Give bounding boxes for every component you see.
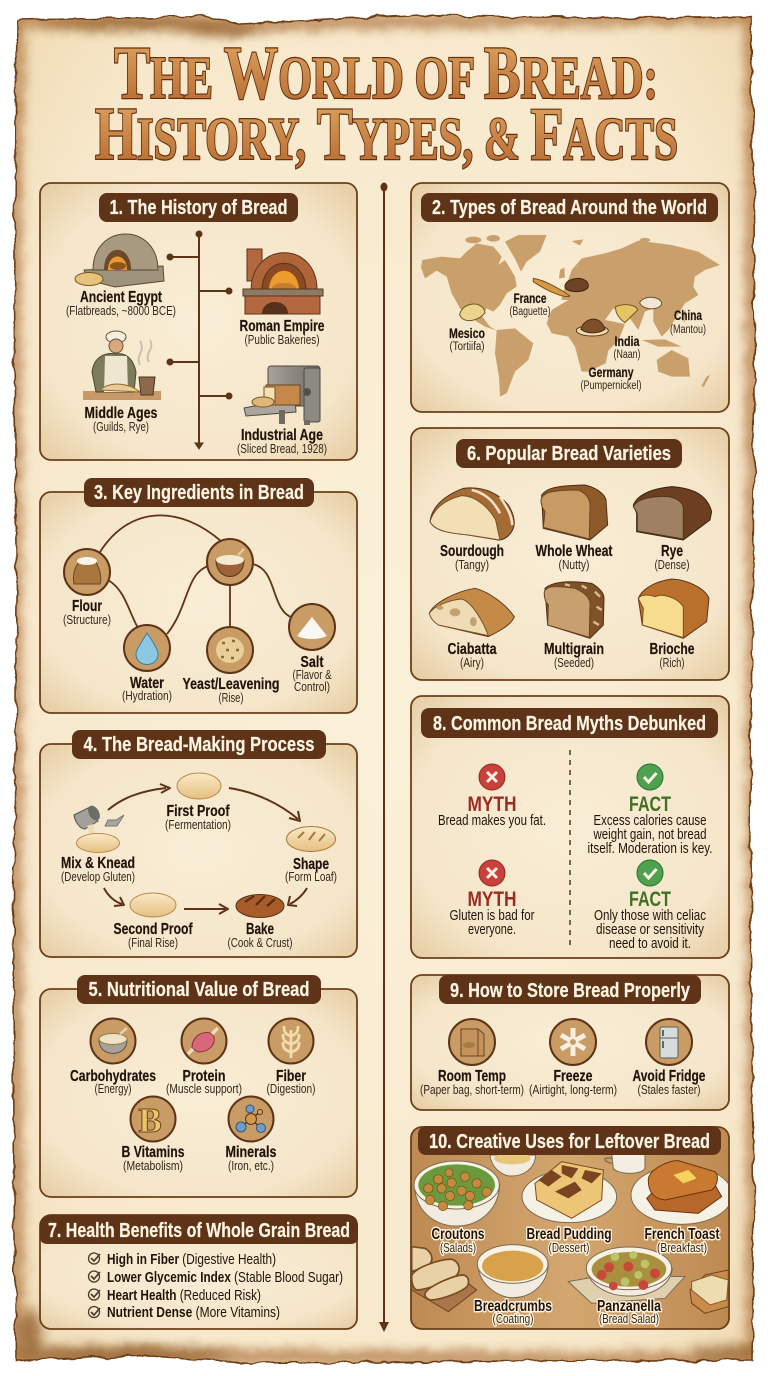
label: Protein: Protein [182,1068,226,1085]
label: Yeast/Leavening: (Rise) [218,691,244,705]
label: Shape: (Form Loaf) [285,870,337,884]
map labels: (Tortiifa) [450,341,485,353]
label: Freeze [529,1068,617,1097]
fact 2: need to avoid it. [609,936,691,952]
benefit: nutrient dense: Nutrient Dense (More Vitamins) [107,1305,280,1321]
fact 2: Only those with celiac [594,908,706,924]
heading: 7. Health Benefits of Whole Grain Bread [48,1220,350,1242]
icon: breadcrumbs bowl [477,1245,548,1298]
heading [456,439,682,468]
heading: 6. Popular Bread Varieties [467,443,671,465]
map labels: Mesico [449,326,485,341]
map labels: India [614,334,640,349]
heading: 9. How to Store Bread Properly [450,980,691,1002]
icon: sliced bread board [412,1247,477,1312]
label: Second Proof [114,921,193,950]
label: Breadcrumbs [474,1298,552,1326]
fact 1: Excess calories cause [594,813,706,829]
label: Second Proof: (Final Rise) [128,936,178,950]
label: Carbohydrates [70,1068,156,1096]
myth 2: Gluten is bad for [450,908,535,924]
heading [72,730,326,759]
label: Whole Wheat: Whole Wheat [536,543,612,560]
label: Water: Water [130,675,164,692]
icon: baked loaf [236,894,284,918]
label: Ancient Egypt: Ancient Egypt [80,289,162,306]
label: Mix and Knead: (Develop Gluten) [61,870,135,884]
label: Water: (Hydration) [122,689,172,703]
icon: yeast [207,627,253,673]
label: Bread Pudding: Bread Pudding [526,1226,612,1243]
fact 1: FACT [629,793,671,816]
label: Minerals: Minerals [226,1144,276,1161]
panel background [411,183,729,412]
label: Room Temp [420,1068,524,1097]
icon: carbohydrates [90,1018,136,1064]
label: Multigrain [544,641,604,670]
label: Industrial Age [237,427,327,456]
icon: rye [633,487,712,540]
icon: croutons salad [414,1161,500,1226]
label: Mix and Knead: Mix & Knead [61,855,135,872]
panel 10: leftover bread [411,1126,732,1329]
icon: first proof dough [177,773,221,799]
icon: fridge [646,1019,692,1065]
title [95,32,678,176]
label: Bread Pudding [526,1226,612,1255]
label: Roman Empire [240,318,325,347]
label: French Toast: French Toast [644,1226,720,1243]
fact 2: FACT [629,888,671,911]
label: Multigrain: (Seeded) [554,656,594,670]
map labels: (Naan) [614,349,641,361]
heading [418,1126,721,1155]
heading [421,708,718,738]
label: Rye: (Dense) [654,558,690,572]
label: Panzanella: Panzanella [597,1298,661,1315]
label: Carbohydrates: Carbohydrates [70,1068,156,1085]
icon: sourdough [430,488,514,540]
icon: paper bag [449,1019,495,1065]
heading [99,193,298,222]
label: Sourdough [440,543,504,572]
myth 2: MYTH [468,888,516,911]
panel 3: ingredients [40,478,357,713]
label: Rye: Rye [661,543,683,560]
label: Room Temp: (Paper bag, short-term) [420,1083,524,1097]
label: Protein: (Muscle support) [166,1082,242,1096]
label: B Vitamins: (Metabolism) [123,1159,183,1173]
label: First Proof: (Fermentation) [165,818,231,832]
label: Freeze: Freeze [554,1068,593,1085]
label: Middle Ages [84,405,158,434]
benefit: fiber: High in Fiber (Digestive Health) [107,1252,276,1268]
label: Second Proof: Second Proof [114,921,193,938]
heading: 4. The Bread-Making Process [84,734,314,756]
central timeline arrow [379,182,389,1332]
panel background [40,989,357,1197]
label: Industrial Age: (Sliced Bread, 1928) [237,442,327,456]
icon: protein [182,1018,226,1064]
label: Flour: (Structure) [63,613,111,627]
label: Roman Empire: Roman Empire [240,318,325,335]
icon: bread slicer [244,366,320,425]
benefit: heart health: Heart Health (Reduced Risk) [107,1288,261,1304]
label: Salt: Salt [300,654,324,671]
panel background [411,696,729,958]
label: Ciabatta: Ciabatta [448,641,497,658]
label: Bake: (Cook & Crust) [228,936,292,950]
label: Minerals [226,1144,276,1173]
label: Bake: Bake [246,921,274,938]
panel background [40,744,357,957]
heading [40,1215,358,1244]
panel background [40,183,357,460]
divider [569,750,571,945]
panel 4: process [40,730,357,957]
label: Sourdough: Sourdough [440,543,504,560]
label: Brioche: Brioche [650,641,695,658]
heading: 3. Key Ingredients in Bread [94,482,304,504]
panel background: wood table [411,1127,729,1329]
benefit: glycemic index: Lower Glycemic Index (Stable Blood Sugar) [107,1270,343,1286]
fact 1: itself. Moderation is key. [588,841,712,857]
panel background [40,492,357,713]
panel 2: world map [411,183,729,412]
fact 2: disease or sensitivity [596,922,705,938]
label: Protein [166,1068,242,1096]
map labels: (Baguette) [510,306,551,318]
label: First Proof [165,803,231,832]
label: Brioche: (Rich) [660,656,684,670]
heading [421,193,718,222]
label: Panzanella [597,1298,661,1326]
icon: garlic bread [690,1270,728,1313]
icon: whole wheat [541,485,608,540]
panel background [40,1215,357,1329]
label: Salt: (Flavor & [292,668,332,682]
heading: 2. Types of Bread Around the World [432,197,707,219]
label: Rye [654,543,690,572]
world map [421,235,720,397]
label: Flour: Flour [72,598,102,615]
heading: 1. The History of Bread [110,197,288,219]
myth 1: Bread makes you fat. [438,813,546,829]
icon: french toast plate [631,1161,732,1224]
label: Whole Wheat [536,543,612,572]
label: French Toast [644,1226,720,1255]
icon: second proof dough [130,893,176,917]
label: Bake [228,921,292,950]
label: Yeast/Leavening [182,676,280,705]
map labels: Germany [588,365,634,380]
label: Flour [63,598,111,627]
panel 6: bread varieties [411,428,729,680]
icon: minerals [228,1096,274,1142]
panel background [411,975,729,1110]
panel 5: nutrition [40,975,357,1197]
connectors [100,515,293,634]
icon: panzanella bowl [568,1247,685,1303]
icon: brioche [638,579,709,638]
label: Industrial Age: Industrial Age [241,427,323,444]
label: Minerals: (Iron, etc.) [228,1159,274,1173]
timeline [167,231,232,449]
icons: world breads [460,278,662,336]
panel 8: myths [411,696,729,958]
myth 2 [450,860,535,938]
icon: roman brick oven [243,249,323,314]
label: Brioche [650,641,695,670]
heading [84,478,314,507]
label: Room Temp: Room Temp [438,1068,506,1085]
table illustrations [412,1152,732,1313]
label: Carbohydrates: (Energy) [94,1082,132,1096]
label: Ancient Egypt [66,289,176,318]
heading: 10. Creative Uses for Leftover Bread [429,1131,710,1153]
icon: snowflake [550,1019,596,1065]
label: French Toast: (Breakfast) [657,1241,707,1255]
process arrows [104,784,307,914]
label: Middle Ages: (Guilds, Rye) [93,420,149,434]
label: Mix and Knead [61,855,135,884]
map labels: China [674,308,702,323]
label: Middle Ages: Middle Ages [84,405,158,422]
icon: b vitamins: B [138,1101,162,1140]
map labels: (Mantou) [670,324,706,336]
heading: 5. Nutritional Value of Bread [88,979,310,1001]
icon: flour [64,549,110,595]
label: Shape: Shape [293,856,329,873]
label: Croutons: (Salads) [440,1241,476,1255]
label: Ciabatta [448,641,497,670]
map labels: France [514,291,547,306]
label: Multigrain: Multigrain [544,641,604,658]
label: Croutons: Croutons [432,1226,484,1243]
label: Bread Pudding: (Dessert) [548,1241,590,1255]
label: Fiber [266,1068,316,1096]
label: Shape [285,856,337,884]
icon: water [124,625,170,671]
heading: 8. Common Bread Myths Debunked [433,713,706,735]
label: Fiber: Fiber [276,1068,306,1085]
label: Breadcrumbs: (Coating) [492,1312,534,1326]
icon: custard bowl [490,1152,536,1176]
label: Ancient Egypt: (Flatbreads, ~8000 BCE) [66,304,176,318]
icon: salt [289,604,335,650]
label: Freeze: (Airtight, long-term) [529,1083,617,1097]
myth 1 [438,764,546,829]
label: Croutons [432,1226,484,1255]
icon: mix and knead [74,804,124,852]
label: Breadcrumbs: Breadcrumbs [474,1298,552,1315]
label: Yeast/Leavening: Yeast/Leavening [182,676,280,693]
label: Panzanella: (Bread Salad) [599,1312,659,1326]
label: Sourdough: (Tangy) [455,558,489,572]
fact 1: weight gain, not bread [593,827,706,843]
panel 7: health benefits [40,1215,358,1329]
heading [439,975,701,1004]
label: Avoid Fridge: (Stales faster) [638,1083,700,1097]
label: Whole Wheat: (Nutty) [558,558,590,572]
label: Roman Empire: (Public Bakeries) [244,333,320,347]
panel 9: storage [411,975,729,1110]
map labels: (Pumpernickel) [580,380,642,392]
icon: ciabatta [429,588,514,637]
icon: shaped loaf [286,826,336,852]
icon: multigrain [544,582,604,638]
label: Ciabatta: (Airy) [460,656,484,670]
icon: mug [605,1153,645,1173]
label: B Vitamins [122,1144,184,1173]
panel background [411,428,729,680]
icon: b vitamins [130,1096,176,1142]
title: THE WORLD OF BREAD: [114,32,658,115]
fact 1 [588,764,712,857]
label: Fiber: (Digestion) [266,1082,316,1096]
icon: fiber [268,1018,314,1064]
label: Water [122,675,172,703]
label: Salt [292,654,332,694]
heading [77,975,321,1004]
label: Avoid Fridge: Avoid Fridge [632,1068,706,1085]
icon: mixing bowl [207,539,253,585]
myth 2: everyone. [468,922,516,938]
icon: clay oven [75,234,164,287]
title: HISTORY, TYPES, & FACTS [95,93,678,176]
label: Salt: Control) [294,680,330,694]
label: B Vitamins: B Vitamins [122,1144,184,1161]
label: Avoid Fridge [632,1068,706,1097]
fact 2 [594,860,706,952]
icon: medieval baker [83,331,161,400]
myth 1: MYTH [468,793,516,816]
panel 1: history [40,183,357,460]
icon: bread pudding plate [522,1162,617,1223]
label: First Proof: First Proof [166,803,230,820]
map labels [449,291,706,392]
